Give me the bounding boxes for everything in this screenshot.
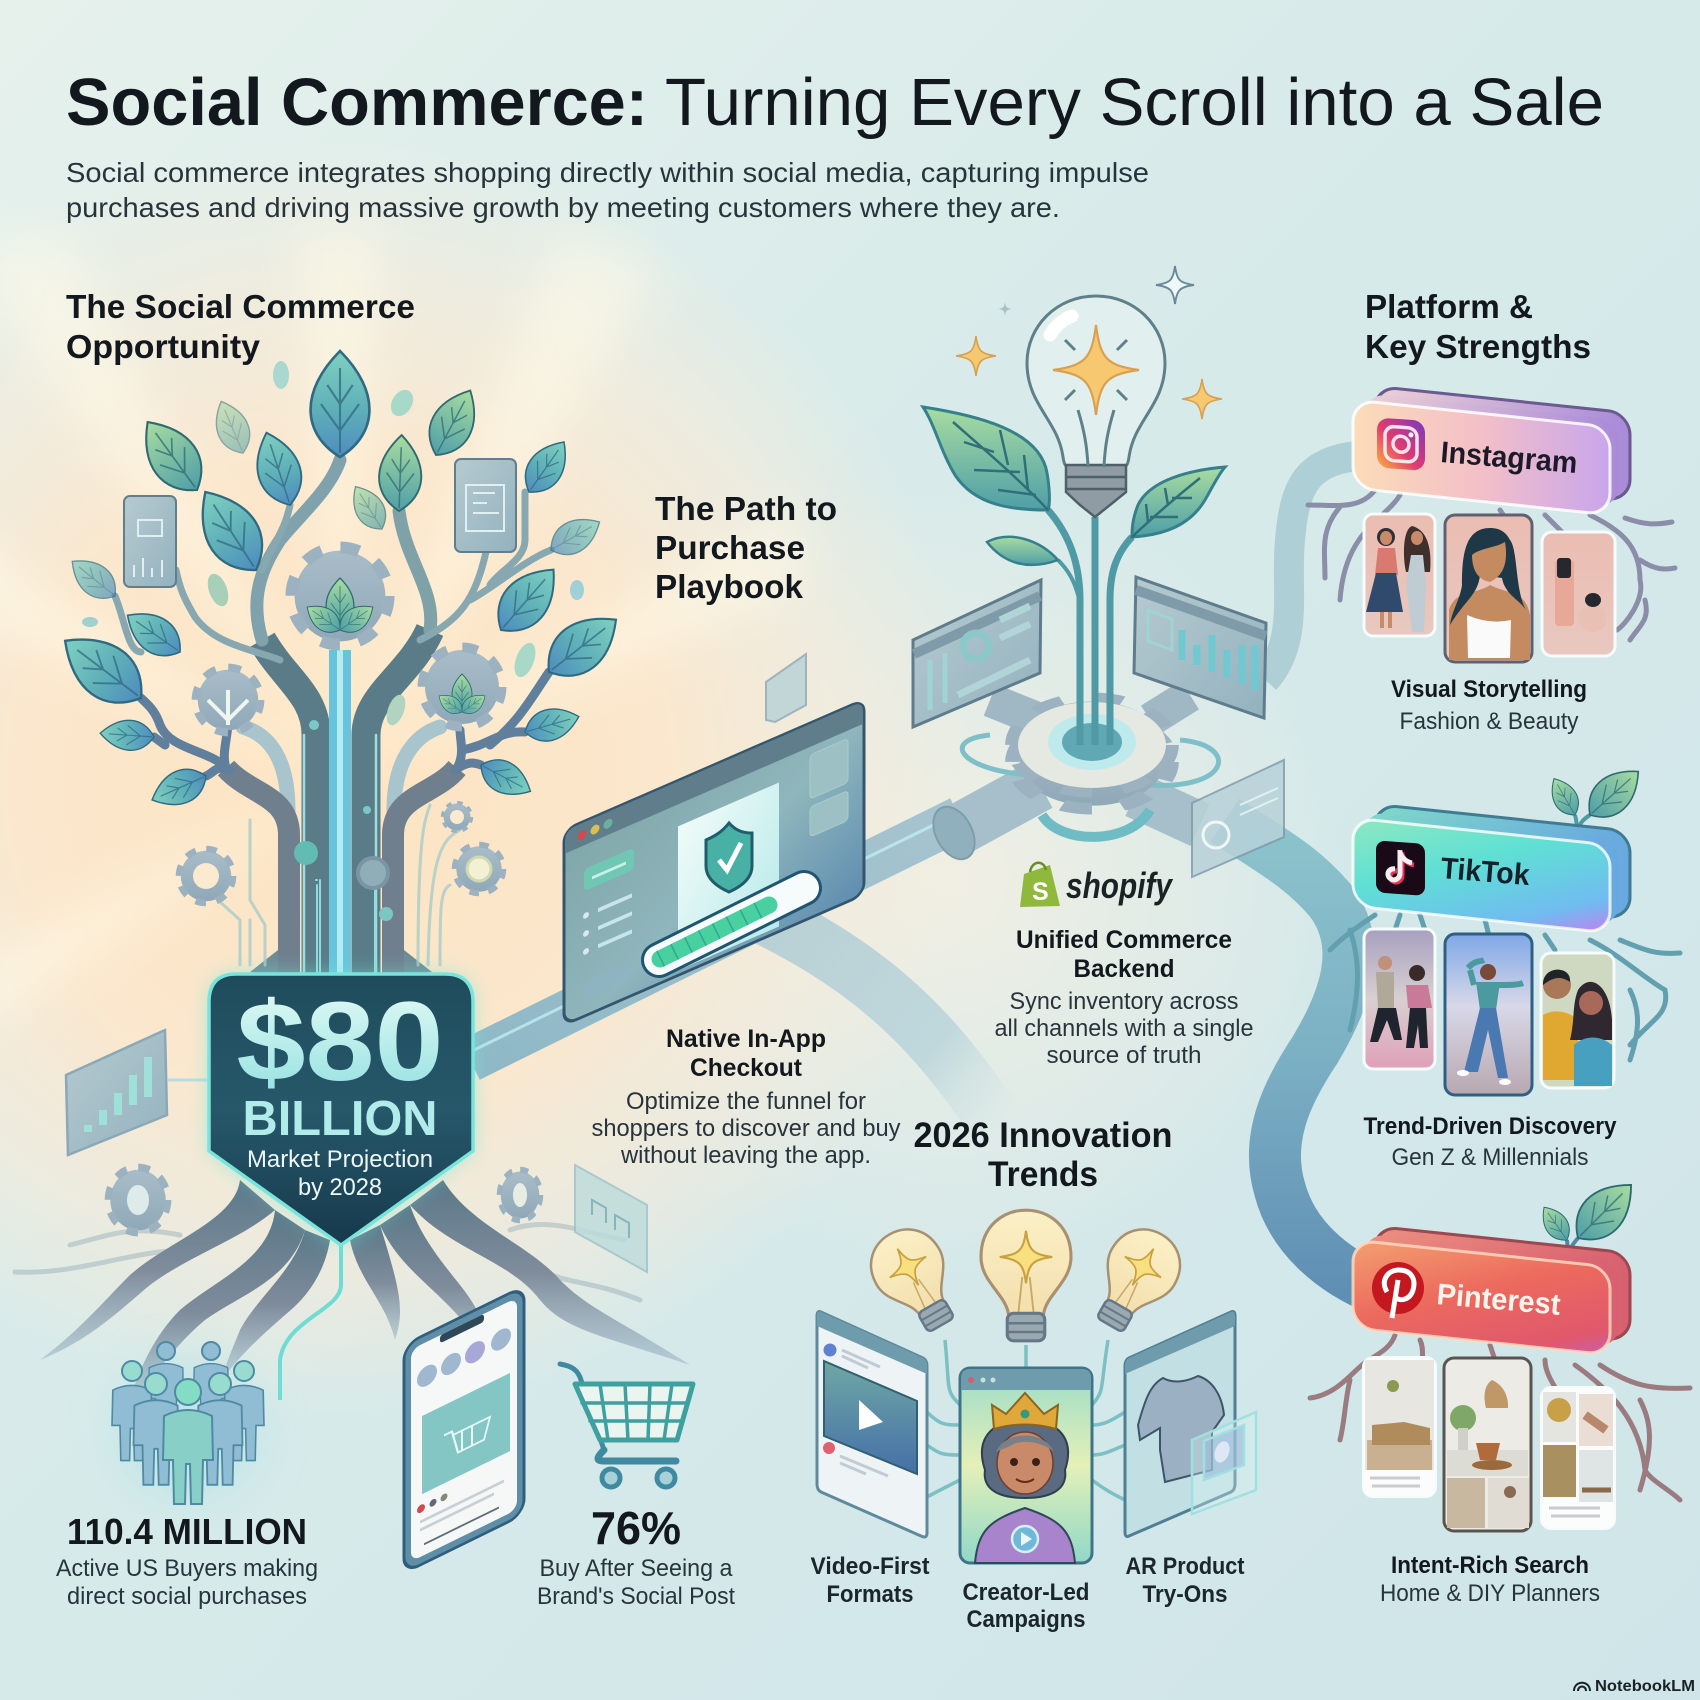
- stat: buyers: 110.4 MILLION: [67, 1511, 307, 1552]
- title: Social Commerce:: [66, 65, 648, 140]
- leaf: right: [1132, 467, 1225, 537]
- tablets: [124, 459, 516, 587]
- heading: opportunity: [66, 288, 415, 365]
- dashboard panels: [913, 580, 1041, 727]
- trend labels: Try-Ons: [1142, 1581, 1228, 1608]
- tiktok caption: [1364, 1113, 1617, 1171]
- subtitle: [66, 157, 1149, 223]
- checkout copy: Native In-App: [666, 1025, 826, 1053]
- trend labels: Creator-Led: [962, 1579, 1090, 1606]
- market projection shield: [209, 974, 473, 1245]
- icon: phone: [404, 1286, 524, 1573]
- stat: buyers: [56, 1511, 318, 1610]
- instagram caption: Fashion & Beauty: [1400, 708, 1578, 735]
- checkout copy: Optimize the funnel for: [626, 1088, 866, 1115]
- stat: 76%: 76%: [591, 1502, 681, 1554]
- video: friends: [1541, 953, 1614, 1088]
- checkout copy: shoppers to discover and buy: [592, 1115, 900, 1142]
- panel: instagram: [1308, 384, 1675, 662]
- title: Turning Every Scroll into a Sale: [665, 65, 1604, 140]
- panel: pinterest: Pinterest: [1435, 1278, 1562, 1322]
- checkout copy: Checkout: [690, 1054, 803, 1082]
- backend copy: all channels with a single: [994, 1015, 1254, 1042]
- title: [66, 65, 1604, 140]
- backend copy: Unified Commerce: [1016, 926, 1232, 954]
- video card: [817, 1312, 927, 1537]
- heading: innovation: [914, 1116, 1172, 1194]
- trend labels: [810, 1553, 1245, 1633]
- lightbulb plant and gear hub: [913, 266, 1284, 877]
- checkout window: [564, 700, 864, 1025]
- icon: shopping cart: [560, 1364, 693, 1487]
- pinterest caption: Home & DIY Planners: [1380, 1580, 1600, 1607]
- video: couple: [1364, 929, 1435, 1069]
- sprout: [1544, 758, 1650, 835]
- subtitle: Social commerce integrates shopping directly within social media, capturing impulse: [66, 157, 1149, 188]
- pin: kitchen: [1444, 1358, 1531, 1531]
- instagram caption: [1391, 676, 1587, 735]
- AR try-on card: [1125, 1312, 1256, 1536]
- heading: platforms: Key Strengths: [1365, 328, 1591, 365]
- icon: tiktok: [1376, 840, 1425, 896]
- checkout copy: [592, 1025, 900, 1169]
- pinterest caption: Intent-Rich Search: [1391, 1552, 1589, 1579]
- stat: 76%: [537, 1502, 735, 1610]
- trunk and branches: [115, 460, 551, 975]
- crown: [992, 1393, 1058, 1429]
- checkout panel: [678, 782, 779, 970]
- sprout: [1535, 1170, 1646, 1262]
- stat: 76%: Buy After Seeing a: [540, 1555, 733, 1582]
- backend copy: [994, 926, 1254, 1069]
- trend labels: AR Product: [1126, 1553, 1245, 1580]
- heading: opportunity: Opportunity: [66, 328, 261, 365]
- shopify logo: [1020, 863, 1174, 907]
- trend labels: Formats: [826, 1581, 914, 1608]
- market projection shield: Market Projection: [247, 1146, 433, 1173]
- side icons around shield: [66, 1030, 647, 1272]
- platform card: [1353, 802, 1630, 935]
- leaf: large left: [923, 407, 1049, 510]
- connecting roads: [470, 455, 1380, 1290]
- watermark: NotebookLM: NotebookLM: [1595, 1678, 1695, 1695]
- shopify logo: S: [1032, 878, 1049, 906]
- heading: playbook: Purchase: [655, 529, 805, 566]
- heading: platforms: Platform &: [1365, 288, 1533, 325]
- tiktok caption: Trend-Driven Discovery: [1364, 1113, 1617, 1140]
- panel: tiktok: TikTok: [1439, 852, 1531, 892]
- panel: pinterest: [1310, 1170, 1690, 1531]
- heading: platforms: [1365, 288, 1591, 365]
- backend copy: source of truth: [1046, 1042, 1202, 1069]
- outer trunk limbs: [226, 768, 289, 975]
- instagram caption: Visual Storytelling: [1391, 676, 1587, 703]
- panel: tiktok: [1330, 758, 1680, 1095]
- market projection shield: by 2028: [298, 1174, 382, 1201]
- upper limbs: [257, 460, 340, 640]
- photo: cosmetics: [1542, 532, 1615, 656]
- card roots: [1308, 490, 1675, 640]
- icon: security shield: [706, 823, 752, 892]
- heading: innovation: Trends: [988, 1155, 1098, 1194]
- backend copy: Backend: [1074, 955, 1174, 983]
- icon: chat bubble card: [766, 654, 806, 722]
- tree illustration: [49, 351, 631, 975]
- trend labels: Video-First: [810, 1553, 930, 1580]
- progress bar: [659, 888, 804, 960]
- roots under shield: [15, 1180, 690, 1415]
- trend labels: Campaigns: [966, 1606, 1086, 1633]
- stat: buyers: direct social purchases: [67, 1583, 307, 1610]
- bulb: [1027, 296, 1165, 468]
- icon: instagram: [1377, 418, 1425, 471]
- platform card: [1353, 384, 1630, 517]
- photo: two women: [1364, 514, 1435, 636]
- pipes: [925, 695, 1219, 866]
- tiktok caption: Gen Z & Millennials: [1392, 1144, 1588, 1171]
- market projection shield: $80: [236, 979, 444, 1104]
- video: dancer: [1445, 934, 1532, 1095]
- stat: 76%: Brand's Social Post: [537, 1583, 735, 1610]
- heading: playbook: [655, 490, 837, 605]
- gears on tree: [179, 547, 503, 903]
- creator card: [960, 1368, 1092, 1563]
- subtitle: purchases and driving massive growth by meeting customers where they are.: [66, 192, 1060, 223]
- leaf: small: [987, 537, 1058, 565]
- icon: buyers group: [112, 1342, 264, 1504]
- gear hub: [1015, 715, 1169, 809]
- shopify logo: shopify: [1066, 865, 1174, 906]
- backend copy: Sync inventory across: [1010, 988, 1238, 1015]
- heading: playbook: The Path to: [655, 490, 837, 527]
- inner trunk limbs: [262, 640, 316, 975]
- pinterest caption: [1380, 1552, 1600, 1607]
- checkout copy: without leaving the app.: [620, 1142, 871, 1169]
- icon: pinterest: [1372, 1262, 1424, 1318]
- innovation trend bulbs: [817, 1210, 1256, 1563]
- stems: [1048, 510, 1132, 745]
- pin: food and decor: [1541, 1387, 1615, 1529]
- photo: portrait: [1445, 515, 1532, 662]
- stat: buyers: Active US Buyers making: [56, 1555, 318, 1582]
- pin: living room: [1363, 1357, 1436, 1497]
- market projection shield: BILLION: [242, 1092, 438, 1146]
- heading: innovation: 2026 Innovation: [914, 1116, 1172, 1155]
- heading: playbook: Playbook: [655, 568, 804, 605]
- platform card: [1353, 1224, 1630, 1357]
- heading: opportunity: The Social Commerce: [66, 288, 415, 325]
- leaves: [49, 351, 631, 815]
- panel: instagram: Instagram: [1439, 436, 1579, 480]
